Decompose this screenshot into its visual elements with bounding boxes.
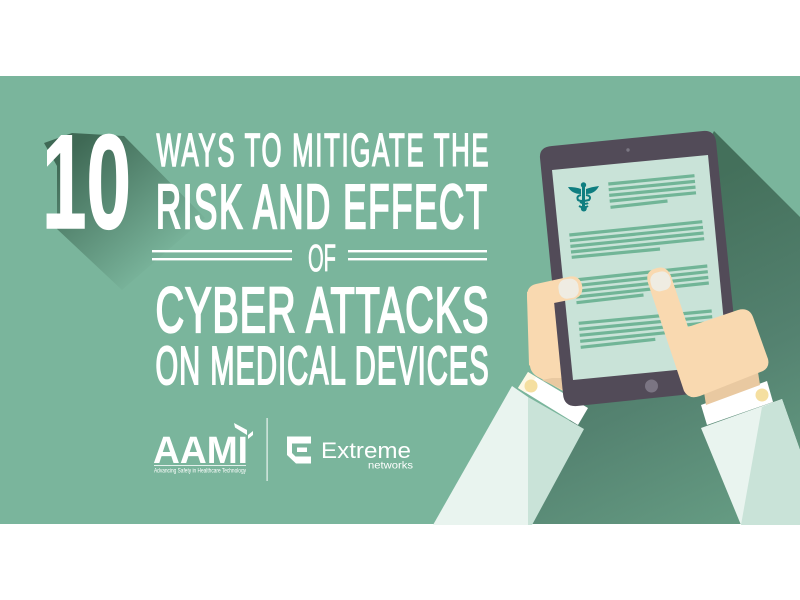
AAMI wing mark <box>234 423 253 439</box>
number 10: 10 <box>42 108 131 257</box>
left thumbnail <box>557 278 580 300</box>
text block 3 <box>575 266 709 303</box>
right cuff <box>701 381 773 425</box>
right wrist shade <box>704 372 760 405</box>
left cuff <box>518 372 588 425</box>
right cuff button <box>756 388 768 402</box>
Extreme Networks logo <box>287 436 413 472</box>
networks wordmark: networks <box>368 460 413 472</box>
title line 1: WAYS TO MITIGATE THE <box>156 124 489 176</box>
title <box>152 124 489 396</box>
tablet screen <box>552 155 728 380</box>
right hand <box>647 268 768 397</box>
AAMI tagline: Advancing Safety in Healthcare Technology <box>154 468 247 474</box>
tablet long shadow <box>532 131 800 524</box>
right fingernail <box>649 270 673 293</box>
AAMI logo <box>153 423 253 474</box>
left sleeve <box>433 386 584 525</box>
long shadow of the number 10 <box>44 133 205 290</box>
title line 5: ON MEDICAL DEVICES <box>156 337 489 396</box>
word OF: OF <box>308 238 336 280</box>
right sleeve <box>701 399 800 525</box>
title line 2: RISK AND EFFECT <box>156 172 487 242</box>
left double rule <box>152 250 292 260</box>
left palm <box>527 292 590 395</box>
tablet <box>540 131 740 406</box>
caduceus icon <box>568 182 599 212</box>
left cuff button <box>524 380 538 392</box>
tablet home button <box>645 380 658 392</box>
right double rule <box>348 250 487 260</box>
title line 4: CYBER ATTACKS <box>156 276 488 346</box>
text block 2 <box>569 222 704 257</box>
Extreme wordmark: Extreme <box>321 438 411 463</box>
Extreme icon <box>287 436 311 464</box>
green banner background <box>0 76 800 524</box>
tablet body <box>540 131 740 406</box>
text block 1 <box>608 176 696 207</box>
left thumb <box>527 276 582 375</box>
text block 4 <box>579 311 713 347</box>
AAMI wordmark: AAMI <box>153 430 248 472</box>
tablet camera <box>626 148 630 152</box>
